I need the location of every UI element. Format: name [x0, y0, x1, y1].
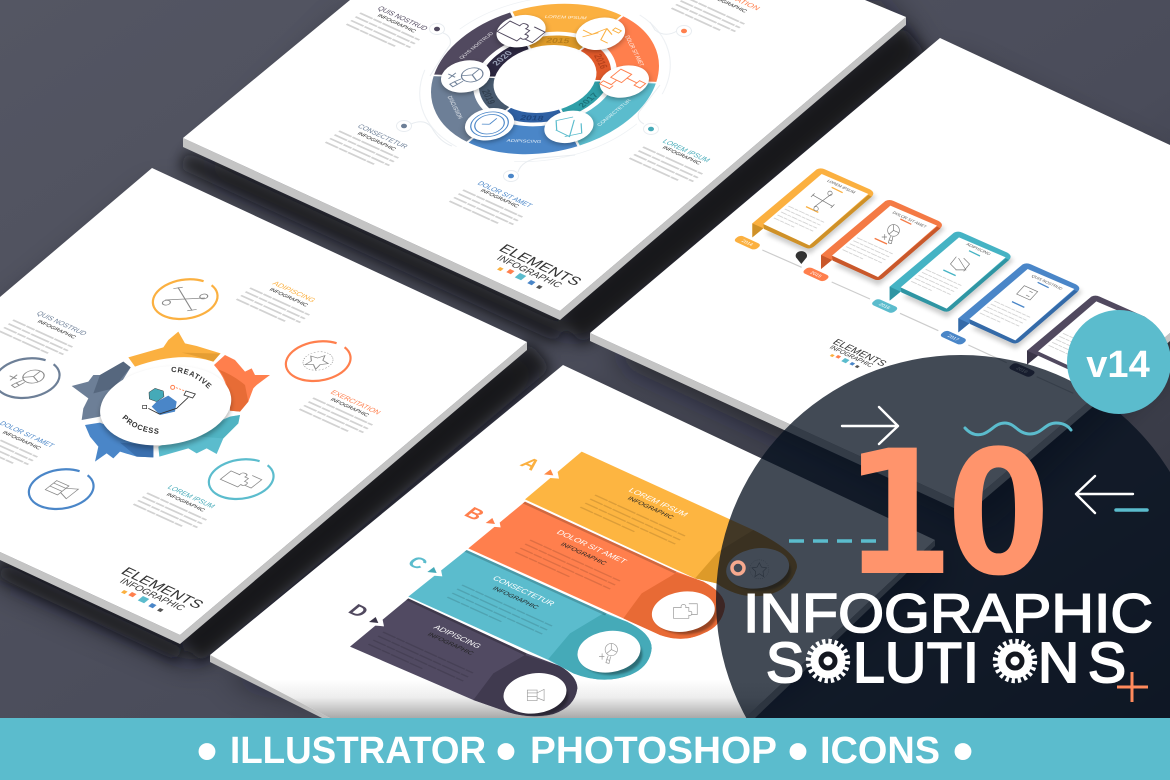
year pills: 2015: [808, 271, 823, 279]
band text: adipiscing: INFOGRAPHIC: [425, 632, 475, 657]
decoration: dashed line: [789, 539, 877, 543]
logo: elements infographic right: INFOGRAPHIC: [827, 345, 874, 369]
year pills: [733, 235, 1036, 378]
left text block: adipiscing: INFOGRAPHIC: [267, 287, 309, 308]
title number 10: [843, 413, 1050, 614]
card 2: [821, 200, 945, 286]
year pills: 2014: [740, 239, 754, 247]
bottom banner: PHOTOSHOP: [530, 730, 777, 772]
title: solutions: L: [853, 631, 885, 695]
ring labels: DOLOR SIT AMET: [623, 35, 645, 68]
location pin: [796, 251, 807, 264]
band text: adipiscing: ADIPISCING: [431, 624, 483, 650]
band D: [350, 598, 577, 718]
title: infographic: INFOGRAPHIC: [743, 582, 1153, 644]
faint connector halo: [368, 0, 722, 193]
text block: lorem ipsum: [630, 138, 712, 185]
ring labels: CONSECTETUR: [596, 99, 633, 127]
central disc: [95, 358, 236, 453]
band text: lorem ipsum: [580, 487, 690, 548]
staggered option bands: [350, 452, 797, 718]
band B: [468, 502, 725, 639]
left text block: exercitation: [300, 389, 383, 436]
band text: dolor sit amet: INFOGRAPHIC: [558, 542, 608, 567]
version badge: [1067, 310, 1170, 414]
band text: consectetur: CONSECTETUR: [490, 575, 557, 607]
card 4: [958, 263, 1083, 349]
card 4: QUIS NOSTRUD: [1030, 274, 1064, 291]
left text block: exercitation: INFOGRAPHIC: [328, 397, 370, 418]
text block: dolor sit amet: DOLOR SIT AMET: [475, 180, 535, 209]
letter markers: B: [459, 504, 489, 524]
timeline axis: [762, 250, 1073, 393]
panel: right sheet: [590, 38, 1170, 514]
ring labels: [410, 0, 683, 167]
title: solutions: S: [1088, 631, 1126, 695]
year pills: 2018: [1014, 366, 1029, 375]
center process icon: [143, 385, 195, 415]
year labels: [456, 22, 634, 137]
logo: elements infographic left: INFOGRAPHIC: [117, 577, 187, 613]
left text block: lorem ipsum: [134, 484, 217, 531]
ring labels: DISCUSSION: [445, 95, 463, 120]
letter notches: [367, 467, 559, 626]
title: solutions: N: [1038, 631, 1079, 695]
card 3: ADIPISCING: [965, 242, 992, 256]
segment shading: [182, 353, 220, 362]
letter markers: A: [515, 454, 545, 474]
title: solutions: S: [766, 631, 804, 695]
text block: quis nostrud: [346, 5, 430, 51]
icon: left arrow: [1076, 476, 1133, 513]
year labels: 2017: [576, 91, 601, 109]
left text block: quis nostrud: INFOGRAPHIC: [35, 319, 77, 340]
left text block: lorem ipsum: LOREM IPSUM: [165, 484, 217, 510]
decoration: teal wave: [965, 423, 1071, 435]
text block: quis nostrud: INFOGRAPHIC: [375, 13, 417, 34]
left sheet radial diagram: [72, 332, 270, 462]
ring labels: QUIS NOSTRUD: [458, 31, 496, 60]
creative process text: CREATIVE: [172, 366, 212, 389]
text block: lorem ipsum: INFOGRAPHIC: [660, 145, 702, 166]
panel: bottom sheet: [210, 365, 935, 718]
left text block: exercitation: EXERCITATION: [328, 389, 383, 416]
band C: [408, 550, 652, 680]
band text: lorem ipsum: LOREM IPSUM: [626, 487, 690, 518]
ring labels: ADIPISCING: [506, 139, 542, 145]
text block: dolor sit amet: [450, 180, 535, 228]
year pills: 2016: [877, 302, 892, 311]
left text block: adipiscing: ADIPISCING: [270, 280, 318, 304]
panel: top sheet: [183, 0, 906, 320]
band text: dolor sit amet: DOLOR SIT AMET: [554, 529, 629, 565]
year labels: 2020: [490, 49, 515, 67]
text block: quis nostrud: QUIS NOSTRUD: [375, 5, 430, 32]
icon: gear two: [995, 641, 1035, 681]
band text: consectetur: [447, 575, 557, 638]
letter markers: C: [402, 553, 432, 573]
title: solutions: U: [885, 631, 926, 695]
text block: exercitation: [672, 0, 762, 35]
band text: dolor sit amet: [515, 529, 629, 593]
decoration: plus: [1117, 672, 1148, 702]
title number 10: 1: [843, 415, 954, 614]
card 5: [1027, 296, 1148, 376]
band text: adipiscing: [368, 624, 483, 685]
ring labels: LOREM IPSUM: [544, 15, 587, 21]
year labels: 2015: [545, 36, 571, 45]
creative process text: PROCESS: [122, 414, 158, 434]
card timeline: [733, 168, 1148, 393]
band text: consectetur: INFOGRAPHIC: [490, 586, 540, 611]
creative process text: [122, 366, 212, 434]
band text: lorem ipsum: INFOGRAPHIC: [625, 496, 675, 521]
panel: left sheet: [0, 168, 527, 644]
year labels: 2018: [519, 114, 545, 122]
left text block: quis nostrud: [0, 310, 89, 358]
card 3: [890, 232, 1014, 317]
star segments: [128, 332, 221, 367]
left text block: quis nostrud: QUIS NOSTRUD: [34, 310, 89, 337]
title: solutions: O: [990, 631, 1034, 695]
icon: gear one: [808, 641, 848, 681]
year pills: 2017: [946, 334, 960, 342]
text block: consectetur: INFOGRAPHIC: [355, 131, 397, 152]
text block: consectetur: CONSECTETUR: [355, 123, 410, 150]
band A: [525, 452, 797, 596]
outline rings: [0, 272, 364, 517]
title: solutions: O: [804, 631, 848, 695]
left text block: lorem ipsum: INFOGRAPHIC: [164, 492, 206, 513]
icon: right arrow: [842, 407, 898, 444]
decoration: teal dash: [1116, 508, 1147, 512]
logo: elements infographic top: INFOGRAPHIC: [494, 254, 564, 290]
title: solutions: T: [927, 631, 962, 695]
bottom banner: ILLUSTRATOR: [230, 730, 486, 772]
left text block: adipiscing: [236, 280, 318, 326]
card 1: [752, 168, 877, 254]
bottom banner: ICONS: [820, 730, 940, 772]
left text block: dolor sit amet: [0, 420, 57, 468]
dark title circle: [716, 355, 1170, 780]
year labels: 2016: [592, 53, 610, 70]
version badge: v14: [1086, 344, 1150, 386]
logo: elements infographic right: ELEMENTS: [830, 338, 889, 368]
bottom banner: [0, 717, 1170, 780]
left text block: dolor sit amet: INFOGRAPHIC: [0, 430, 42, 451]
central disc shadow: [95, 361, 237, 457]
year labels: 2019: [479, 88, 498, 106]
circular timeline diagram: [368, 0, 722, 193]
decoration: pink ring: [732, 562, 744, 574]
inner year ring: [450, 18, 640, 140]
text block: lorem ipsum: LOREM IPSUM: [660, 138, 712, 164]
logo: elements infographic top: ELEMENTS: [495, 242, 585, 289]
letter markers: [343, 454, 545, 621]
icon discs: [402, 0, 689, 174]
text block: consectetur: [326, 123, 410, 169]
outer ring segments: [382, 0, 708, 184]
card 2: DOLOR SIT AMET: [891, 210, 928, 229]
logo: elements infographic left: ELEMENTS: [117, 565, 207, 612]
card 1: LOREM IPSUM: [826, 179, 857, 194]
title: solutions: I: [963, 631, 979, 695]
text block: dolor sit amet: INFOGRAPHIC: [478, 188, 520, 209]
letter markers: D: [343, 601, 373, 621]
connectors and nodes for top sheet: [396, 22, 692, 182]
title number 10: 0: [947, 413, 1050, 614]
